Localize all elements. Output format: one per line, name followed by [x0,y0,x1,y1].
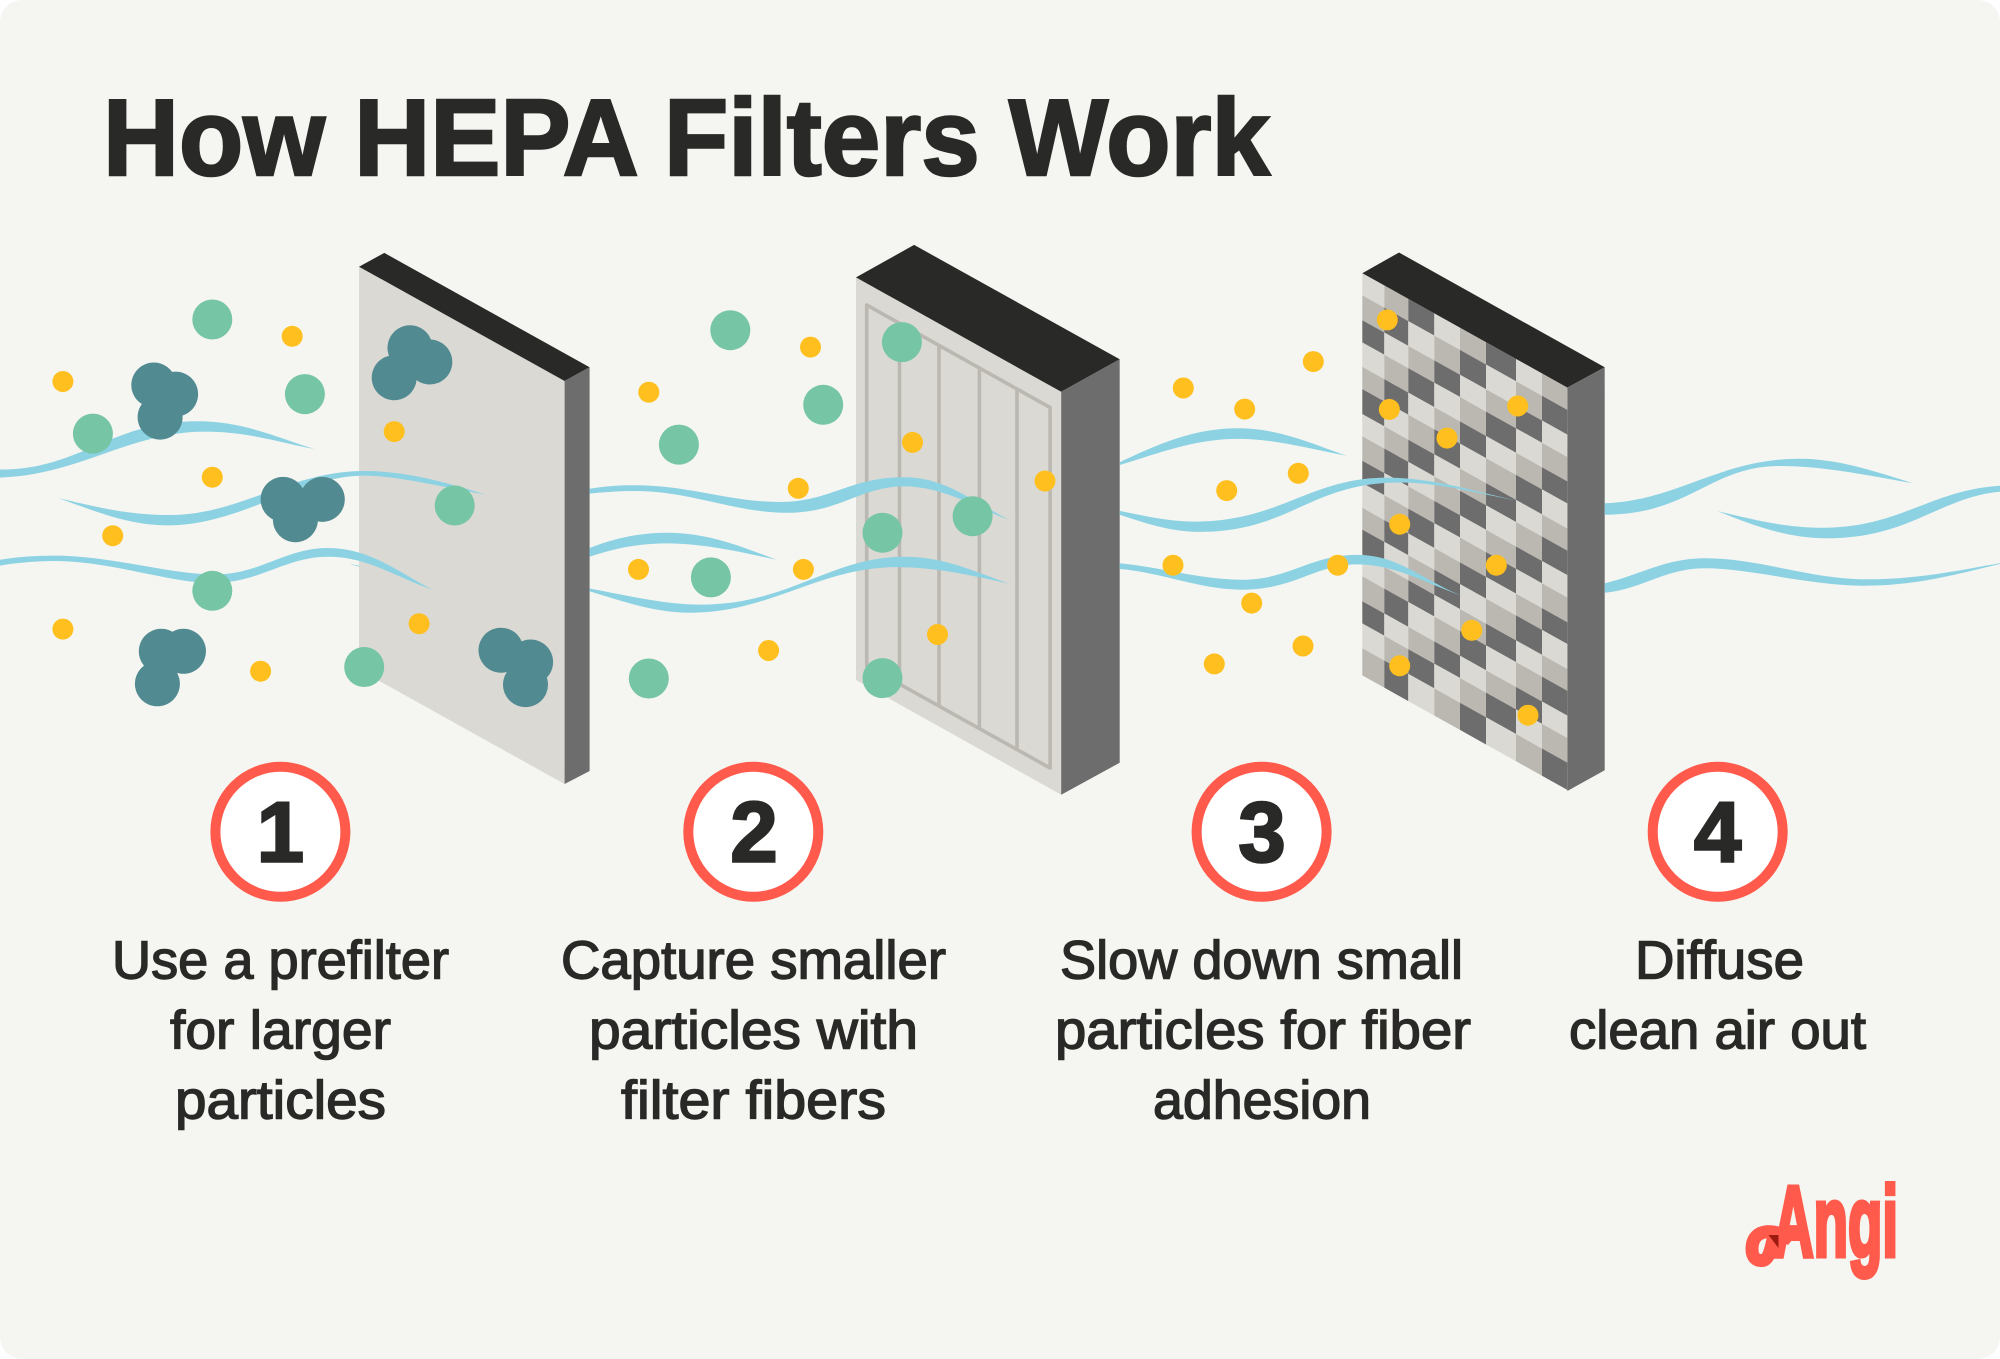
step 1 label: for larger [170,1000,391,1060]
step 4 label: clean air out [1569,1000,1866,1060]
number badge 2: 2 [730,786,778,880]
logo: Angi: Angi [1773,1166,1898,1278]
step 4 label: Diffuse [1635,930,1804,990]
step 1 label: particles [175,1070,386,1130]
step 2 [561,767,946,1130]
step 2 label: Capture smaller [561,930,946,990]
number badge 3: 3 [1238,786,1286,880]
medium green particles [73,300,993,698]
number badge 2 [688,767,818,897]
number badge 1 [215,767,345,897]
filter 1: prefilter panel [359,253,590,784]
number badge 4 [1653,767,1783,897]
step 1 label [112,930,449,1130]
number badge 4: 4 [1694,786,1741,880]
large particle clusters [131,325,553,707]
step 2 label [561,930,946,1130]
step 3 label: Slow down small [1060,930,1463,990]
number badge 3 [1197,767,1327,897]
step 4 [1569,767,1866,1060]
logo: Angi [1752,1166,1898,1278]
step 4 label [1569,930,1866,1060]
step 3 [1055,767,1471,1130]
step 1 label: Use a prefilter [112,930,449,990]
filter 3: checker panel [1362,252,1605,791]
step 1 [112,767,449,1130]
small yellow particles [52,309,1538,726]
step 3 label [1055,930,1471,1130]
step 2 label: particles with [589,1000,918,1060]
title: How HEPA Filters Work [103,77,1270,199]
air flow waves [0,421,2000,613]
step 3 label: particles for fiber [1055,1000,1471,1060]
number badge 1: 1 [257,786,304,880]
step 2 label: filter fibers [621,1070,886,1130]
filter 2: fiber panel [856,245,1120,795]
step 3 label: adhesion [1153,1070,1371,1130]
